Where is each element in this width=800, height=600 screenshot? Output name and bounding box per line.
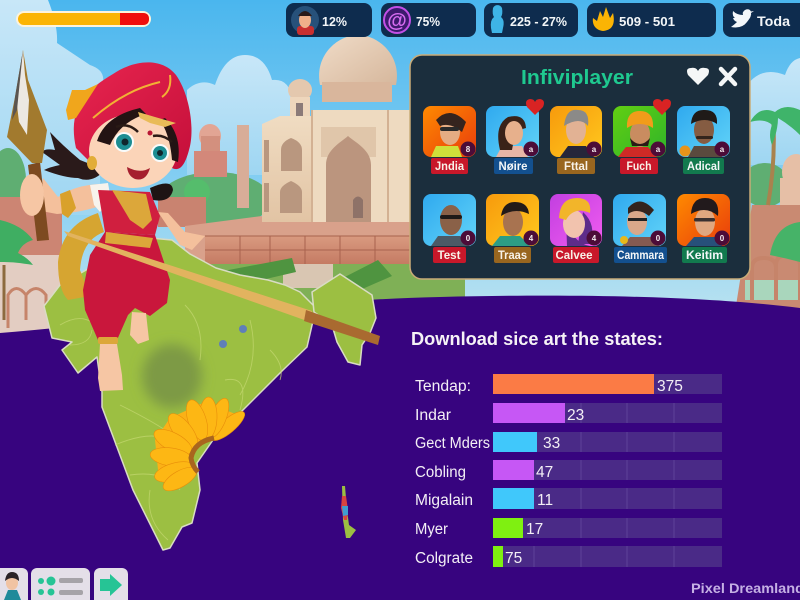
left eye — [114, 132, 134, 152]
distant trees — [0, 148, 789, 228]
spear head silver — [16, 50, 29, 135]
narrow lower arch — [264, 183, 269, 212]
earring — [87, 156, 97, 170]
bar row: Indar — [415, 403, 584, 424]
player card 5 — [677, 106, 730, 174]
palm tree upper right — [750, 107, 800, 205]
bar row: Myer: Myer — [415, 521, 448, 538]
player card 2 — [486, 99, 544, 174]
palm tree lower right — [770, 222, 800, 262]
player card 8: Calvee — [556, 250, 592, 262]
bar row: Cobling — [415, 460, 553, 481]
stat pill: users — [484, 3, 578, 37]
at sign icon: @ — [387, 10, 407, 32]
stat pill: twitter: Toda — [757, 14, 791, 29]
narrow upper arch — [264, 140, 269, 172]
player card 9: 0 — [656, 234, 661, 243]
stat pill: at sign: 75% — [416, 14, 440, 29]
main dome — [319, 35, 397, 85]
central shadow — [142, 344, 202, 408]
chart heading: Download sice art the states: — [411, 328, 663, 349]
stat pill: player — [286, 3, 372, 37]
right fort wall and railing — [735, 205, 800, 312]
stat pill: at sign — [381, 3, 476, 37]
green hedges — [218, 258, 392, 290]
shield — [58, 213, 104, 300]
ankle band — [98, 337, 118, 344]
player avatar icon — [291, 6, 319, 35]
arch ornament — [321, 127, 376, 157]
stat pill: twitter — [723, 3, 800, 37]
bar row: Tendap: Tendap: — [415, 378, 471, 395]
spear head gold — [7, 50, 47, 163]
player card 3: a — [592, 145, 597, 154]
railing left — [8, 288, 46, 328]
player card 2: a — [529, 145, 534, 154]
bar row: Colgrate: 75 — [505, 550, 522, 567]
close icon — [721, 69, 735, 84]
map of India — [44, 238, 376, 550]
bar row: Gect Mders — [415, 432, 560, 452]
watermark: Pixel Dreamland — [691, 580, 800, 596]
turban ornament — [66, 84, 98, 120]
player card 5: a — [720, 145, 725, 154]
player card 9: Cammara — [617, 250, 665, 262]
central arch — [326, 136, 371, 222]
panel title: Infiviplayer — [521, 67, 633, 89]
player card 10: 0 — [720, 234, 725, 243]
bar row: Indar: Indar — [415, 407, 451, 424]
player card 7: 4 — [529, 234, 534, 243]
spear — [7, 50, 49, 241]
minaret — [237, 125, 249, 208]
bar row: Indar: 23 — [567, 407, 584, 424]
bar row: Gect Mders: 33 — [543, 435, 560, 452]
bar row: Colgrate: Colgrate — [415, 550, 473, 567]
spear edge dark — [12, 50, 23, 120]
player card 6: 0 — [466, 234, 471, 243]
button: arrow — [94, 568, 128, 600]
bar row: Migalain: 11 — [537, 492, 553, 509]
bird icon — [731, 9, 754, 27]
heart icon — [687, 68, 709, 85]
long staff — [64, 231, 380, 345]
player card 9 — [613, 194, 667, 263]
stat pill: player: 12% — [322, 14, 347, 29]
terrace — [185, 216, 420, 270]
hand — [20, 174, 44, 216]
bar row: Cobling: 47 — [536, 464, 553, 481]
upper side arch — [281, 138, 302, 171]
player card 7 — [486, 194, 539, 263]
main landmass — [44, 238, 316, 550]
mouth — [127, 167, 150, 180]
building body — [262, 116, 415, 222]
player card 7: Traas — [498, 250, 527, 262]
bar row: Migalain: Migalain — [415, 492, 473, 509]
player card 3 — [550, 106, 602, 174]
button: list — [31, 568, 90, 600]
right eye — [151, 144, 169, 162]
player card 6: Test — [438, 250, 461, 262]
lower dress — [83, 232, 170, 340]
door — [353, 196, 363, 218]
player card 10 — [677, 194, 730, 263]
player card 4: a — [656, 145, 661, 154]
dome neck — [322, 82, 392, 102]
player card 8 — [550, 194, 602, 263]
map dots — [239, 325, 247, 333]
button: avatar — [0, 568, 28, 600]
left chhatri — [288, 79, 312, 117]
player card 2: Nøire — [498, 161, 528, 173]
small island — [341, 486, 356, 538]
bar row: Myer: 17 — [526, 521, 543, 538]
player card 8: 4 — [592, 234, 597, 243]
flame icon — [593, 7, 614, 31]
purple ground — [0, 296, 800, 600]
distant domed building — [194, 124, 227, 177]
player card 1: Jndia — [435, 161, 465, 173]
clouds — [0, 0, 800, 215]
gold necklace — [112, 190, 152, 229]
standing foot — [98, 344, 123, 391]
player panel — [410, 55, 750, 279]
map pattern lines — [60, 305, 281, 540]
bar row: Myer — [415, 518, 543, 538]
player card 6 — [423, 194, 476, 263]
gold armband — [60, 190, 76, 218]
far right building — [780, 154, 800, 206]
sunflower — [149, 396, 249, 495]
bar row: Migalain — [415, 488, 553, 509]
player card 1 — [423, 106, 476, 174]
player card 3: Fttal — [564, 161, 588, 173]
eyebrows — [116, 125, 172, 142]
hair plume — [42, 132, 105, 180]
player card 10: Keitim — [686, 250, 723, 262]
bar row: Tendap — [415, 374, 683, 395]
stat pill: flame: 509 - 501 — [619, 14, 675, 29]
Taj Mahal — [262, 35, 415, 222]
other arm — [158, 212, 205, 250]
raised foot — [130, 312, 149, 344]
turban — [74, 62, 191, 169]
heroine character — [7, 50, 205, 391]
player card 5: Adical — [687, 161, 720, 173]
turban stripes — [93, 75, 170, 118]
bright tree — [184, 179, 210, 205]
bar row: Gect Mders: Gect Mders — [415, 435, 490, 452]
player card 4 — [613, 99, 671, 174]
hair right — [160, 118, 179, 162]
red fort wall left — [0, 197, 62, 257]
sky background — [0, 0, 800, 340]
red fort wall behind terrace — [158, 197, 206, 227]
chart tracks — [493, 374, 722, 567]
player card 1: 8 — [466, 145, 471, 154]
sleeve — [90, 183, 111, 212]
bar row: Tendap: 375 — [657, 378, 683, 395]
lower side arch — [280, 181, 302, 213]
garden — [205, 264, 465, 304]
spear shaft — [28, 162, 49, 241]
bar row: Colgrate — [415, 546, 522, 567]
north-east lobe — [312, 274, 376, 365]
health bar — [16, 11, 151, 27]
player card 4: Fuch — [626, 161, 652, 173]
tiara — [138, 112, 176, 127]
hair front — [97, 108, 146, 145]
raised arm — [36, 178, 102, 214]
right curl — [150, 183, 173, 201]
bar chart — [415, 374, 722, 567]
palm tree left — [0, 220, 33, 320]
courtyard left — [0, 255, 70, 340]
dress top — [98, 190, 160, 235]
stat pill: flame — [587, 3, 716, 37]
bar row: Cobling: Cobling — [415, 464, 466, 481]
face — [89, 114, 177, 188]
gold belt — [105, 232, 153, 248]
bindi — [148, 130, 152, 136]
stat pill: users: 225 - 27% — [510, 14, 567, 29]
person icon — [491, 5, 504, 33]
